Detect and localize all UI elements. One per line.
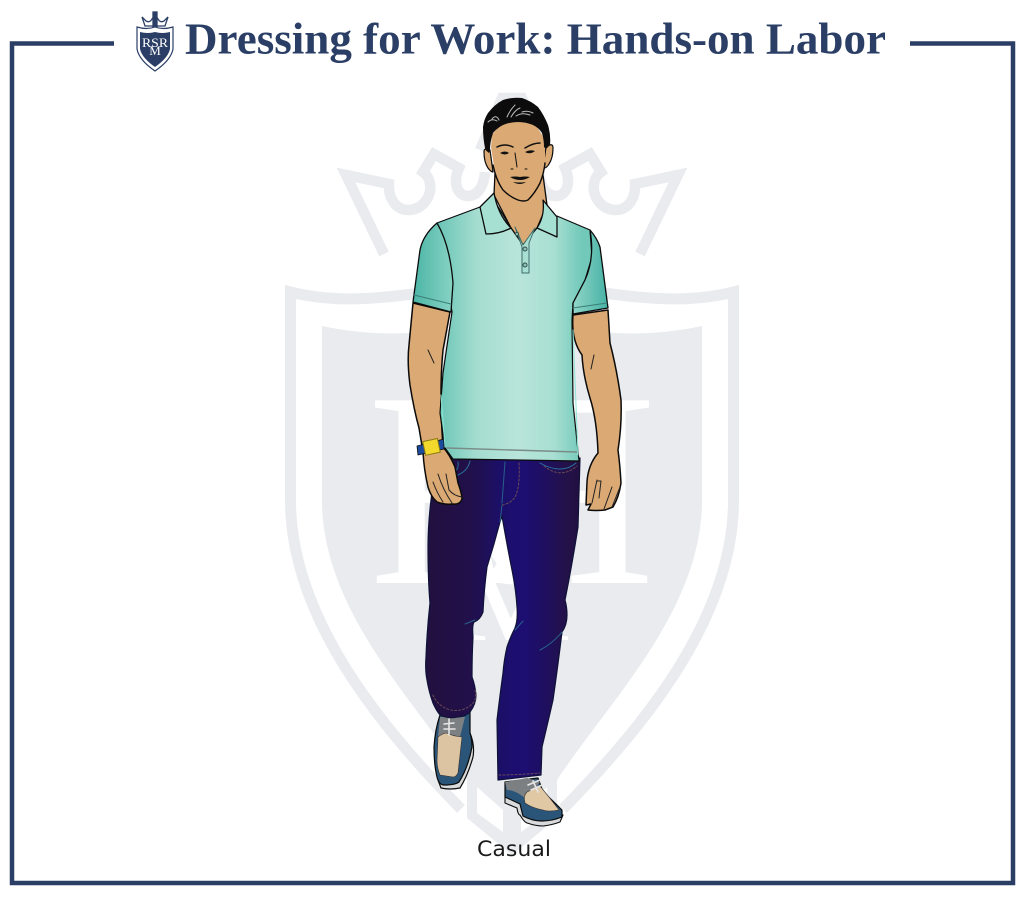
watermark outer shield band	[290, 292, 734, 809]
watermark white chevrons	[477, 787, 547, 832]
watermark inner shield fill	[322, 326, 702, 855]
polo shirt body	[437, 200, 592, 461]
right shoe sole	[505, 795, 563, 826]
right arm	[573, 310, 621, 510]
right shoe upper	[505, 778, 562, 821]
caption: Casual: Casual	[477, 837, 551, 862]
left shoe sole	[438, 733, 474, 789]
neck and face	[483, 98, 553, 245]
collar	[480, 193, 557, 237]
left shoe upper	[434, 712, 472, 785]
watermark monogram: M	[451, 520, 572, 670]
watermark monogram: S	[476, 450, 559, 616]
wristwatch	[417, 438, 444, 455]
watermark monogram: R	[367, 335, 554, 644]
face	[491, 120, 545, 201]
left arm	[408, 303, 462, 504]
ears	[484, 145, 553, 172]
right shoe	[505, 778, 563, 826]
jeans seams and stitching	[433, 461, 577, 775]
logo monogram: RSR	[142, 35, 168, 50]
hair	[483, 98, 550, 153]
facial features	[497, 143, 540, 148]
jeans	[426, 456, 580, 780]
watermark monogram	[367, 335, 657, 670]
neck	[494, 173, 547, 245]
watermark crest	[290, 98, 734, 855]
figure: man in polo and jeans	[408, 98, 621, 826]
logo shield	[137, 27, 173, 71]
left sleeve	[413, 223, 453, 312]
logo crest	[137, 12, 173, 71]
logo monogram	[142, 35, 168, 58]
watermark crown	[346, 98, 678, 254]
placket and buttons	[515, 227, 535, 273]
logo monogram: M	[149, 43, 161, 58]
hair highlights	[488, 105, 533, 122]
logo crown	[142, 12, 168, 28]
right sleeve	[573, 230, 608, 314]
title: Dressing for Work: Hands-on Labor	[185, 14, 886, 64]
left shoe	[434, 712, 474, 789]
watermark monogram: R	[470, 335, 657, 644]
